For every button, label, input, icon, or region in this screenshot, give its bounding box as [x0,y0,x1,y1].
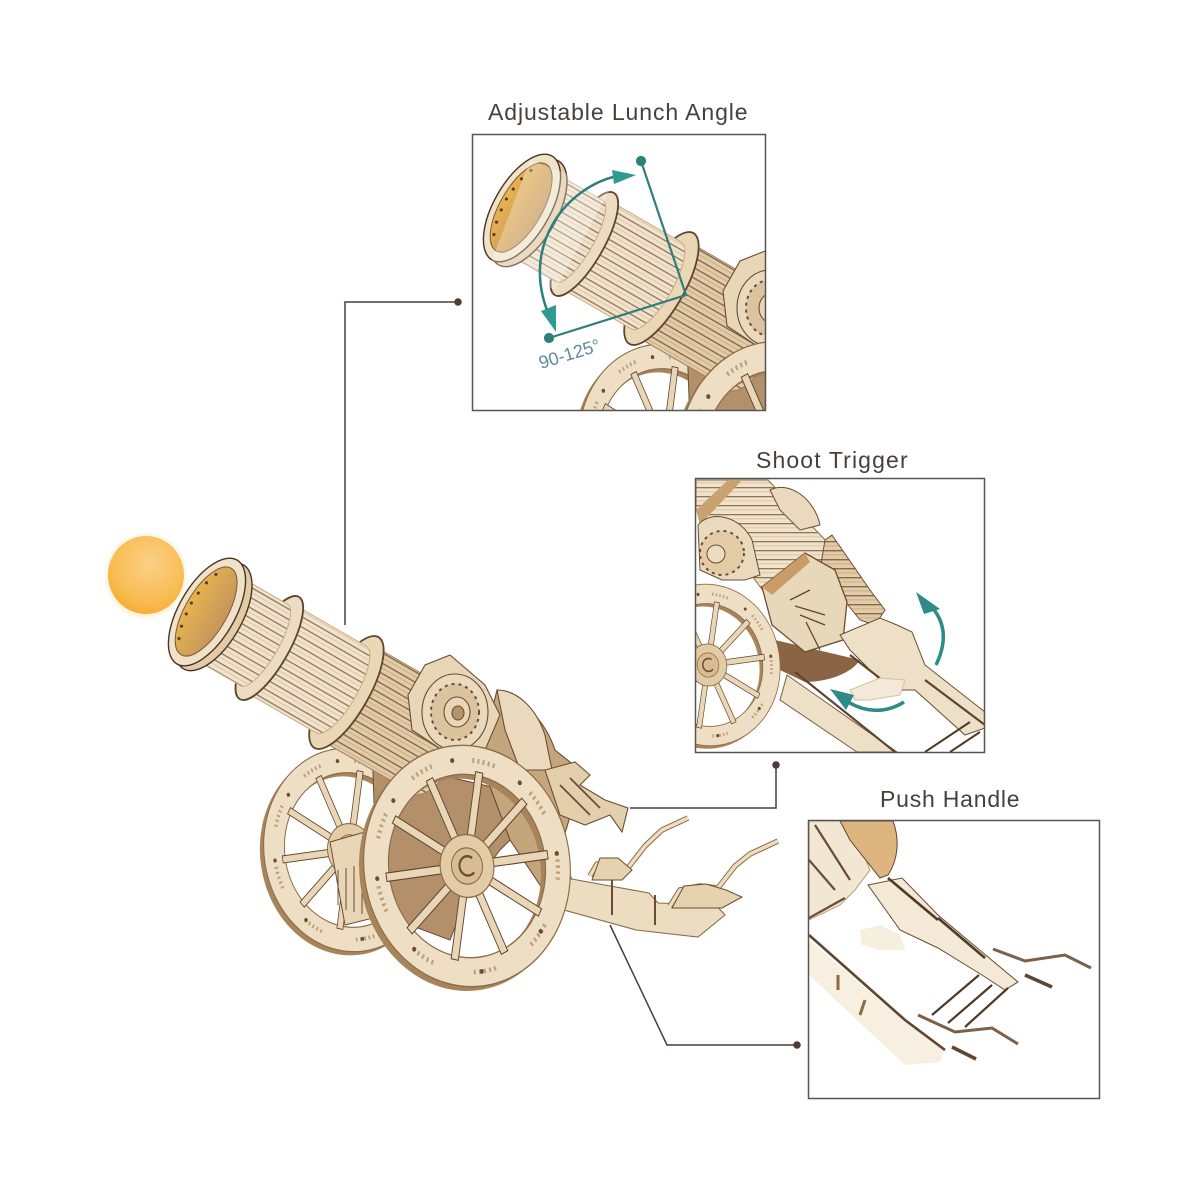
bore holes [171,569,218,641]
connector: handle to push handle inset [610,925,800,1048]
lower trail [809,940,945,1065]
lower trail [780,675,897,752]
collar [696,480,742,525]
barrel front section [190,575,300,693]
angle arc arrow [540,170,636,332]
bore [163,558,249,665]
frame [696,478,984,752]
bracket [770,487,820,530]
cross bars [932,975,1008,1027]
left handle [590,818,688,880]
lower carriage body [335,745,525,940]
trunnion gear [408,655,500,752]
wooden cannon [151,543,778,1004]
connector: barrel to launch angle inset [345,299,461,625]
dark under plate [775,640,860,682]
lower grip [918,1015,1018,1044]
front wheel [343,732,586,1004]
enlarged barrel view [482,154,765,410]
handle closeup [809,821,1092,1065]
left arrow [830,689,904,710]
side plate [762,553,847,652]
barrel ring three [295,626,397,759]
plate fragment [809,821,870,920]
tan tube [840,821,897,878]
side tube [820,535,885,625]
barrel ring two [223,587,315,709]
inset: push handle [808,820,1100,1098]
muzzle flanges [152,546,268,683]
trail [555,875,725,937]
upper trail and trigger [840,618,985,735]
upper hand [1025,975,1052,987]
rear carriage and trigger [480,690,628,900]
ammunition crate [330,830,385,925]
inset: shoot trigger [694,478,986,754]
back wheel [246,737,450,967]
angle label: 90-125° [536,335,603,373]
barrel middle section [244,605,380,741]
barrel closeup [696,480,826,591]
right handle [670,841,778,908]
gear [698,517,760,580]
angle lines [545,157,686,342]
upper trail [868,878,1018,990]
title: adjustable lunch angle: Adjustable Lunch Angle [488,99,748,125]
title: push handle: Push Handle [880,786,1020,812]
inset: launch angle [472,134,766,412]
trigger blob [860,925,905,950]
wheel closeup [696,584,780,749]
frame [808,820,1100,1098]
rear rails [925,722,980,752]
up arrow [916,592,943,665]
lower hand [952,1047,976,1059]
upper grip [993,949,1091,968]
title: shoot trigger: Shoot Trigger [756,447,908,473]
frame [472,134,766,410]
ball projectile [103,531,189,621]
trigger closeup [696,480,984,752]
connector: trigger to shoot trigger inset [630,762,779,808]
barrel [151,543,490,812]
barrel rear section [323,648,485,804]
